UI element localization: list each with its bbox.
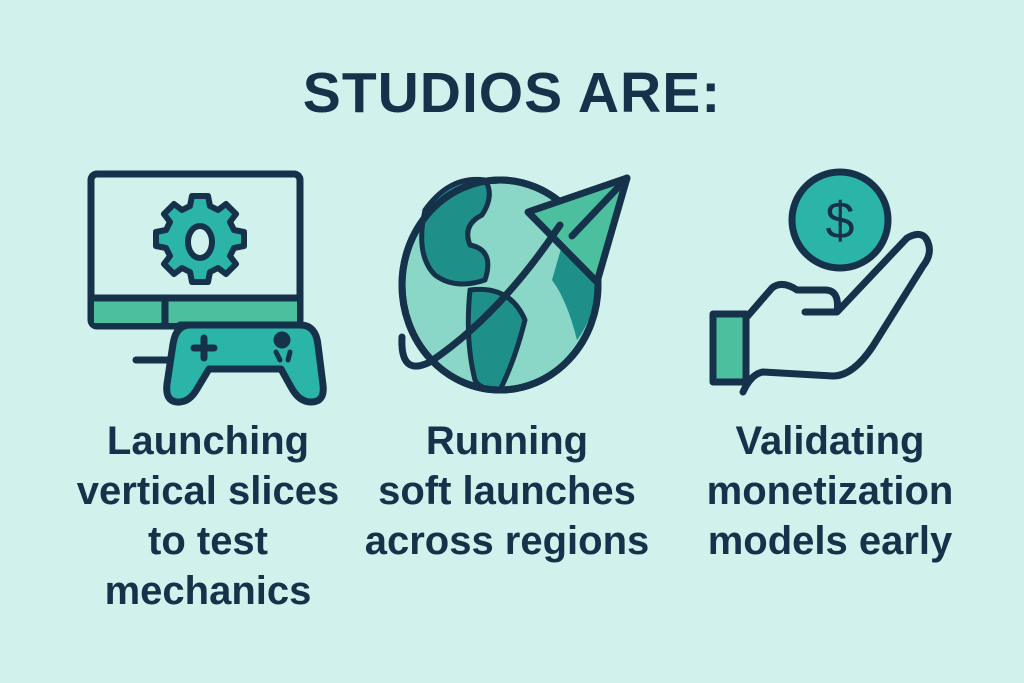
- text: column 2: across regions: [365, 519, 649, 563]
- text: column 3: [707, 419, 953, 563]
- text: column 2: [365, 419, 649, 563]
- text: column 3: models early: [708, 519, 952, 563]
- text: column 1: Launching: [107, 419, 309, 463]
- text: column 1: [76, 419, 339, 613]
- text: column 2: soft launches: [378, 469, 636, 513]
- text: column 3: Validating: [736, 419, 924, 463]
- text: column 1: mechanics: [105, 569, 311, 613]
- text: column 3: monetization: [707, 469, 953, 513]
- icon: hand with coin: $: [826, 192, 855, 250]
- text: column 1: to test: [148, 519, 268, 563]
- text: column 2: Running: [426, 419, 588, 463]
- icon: hand with coin: [713, 172, 929, 392]
- icon: monitor with gear and controller: [91, 174, 323, 402]
- text: column 1: vertical slices: [77, 469, 339, 513]
- title: STUDIOS ARE:: [303, 61, 721, 125]
- icon: globe with paper plane: [402, 178, 627, 390]
